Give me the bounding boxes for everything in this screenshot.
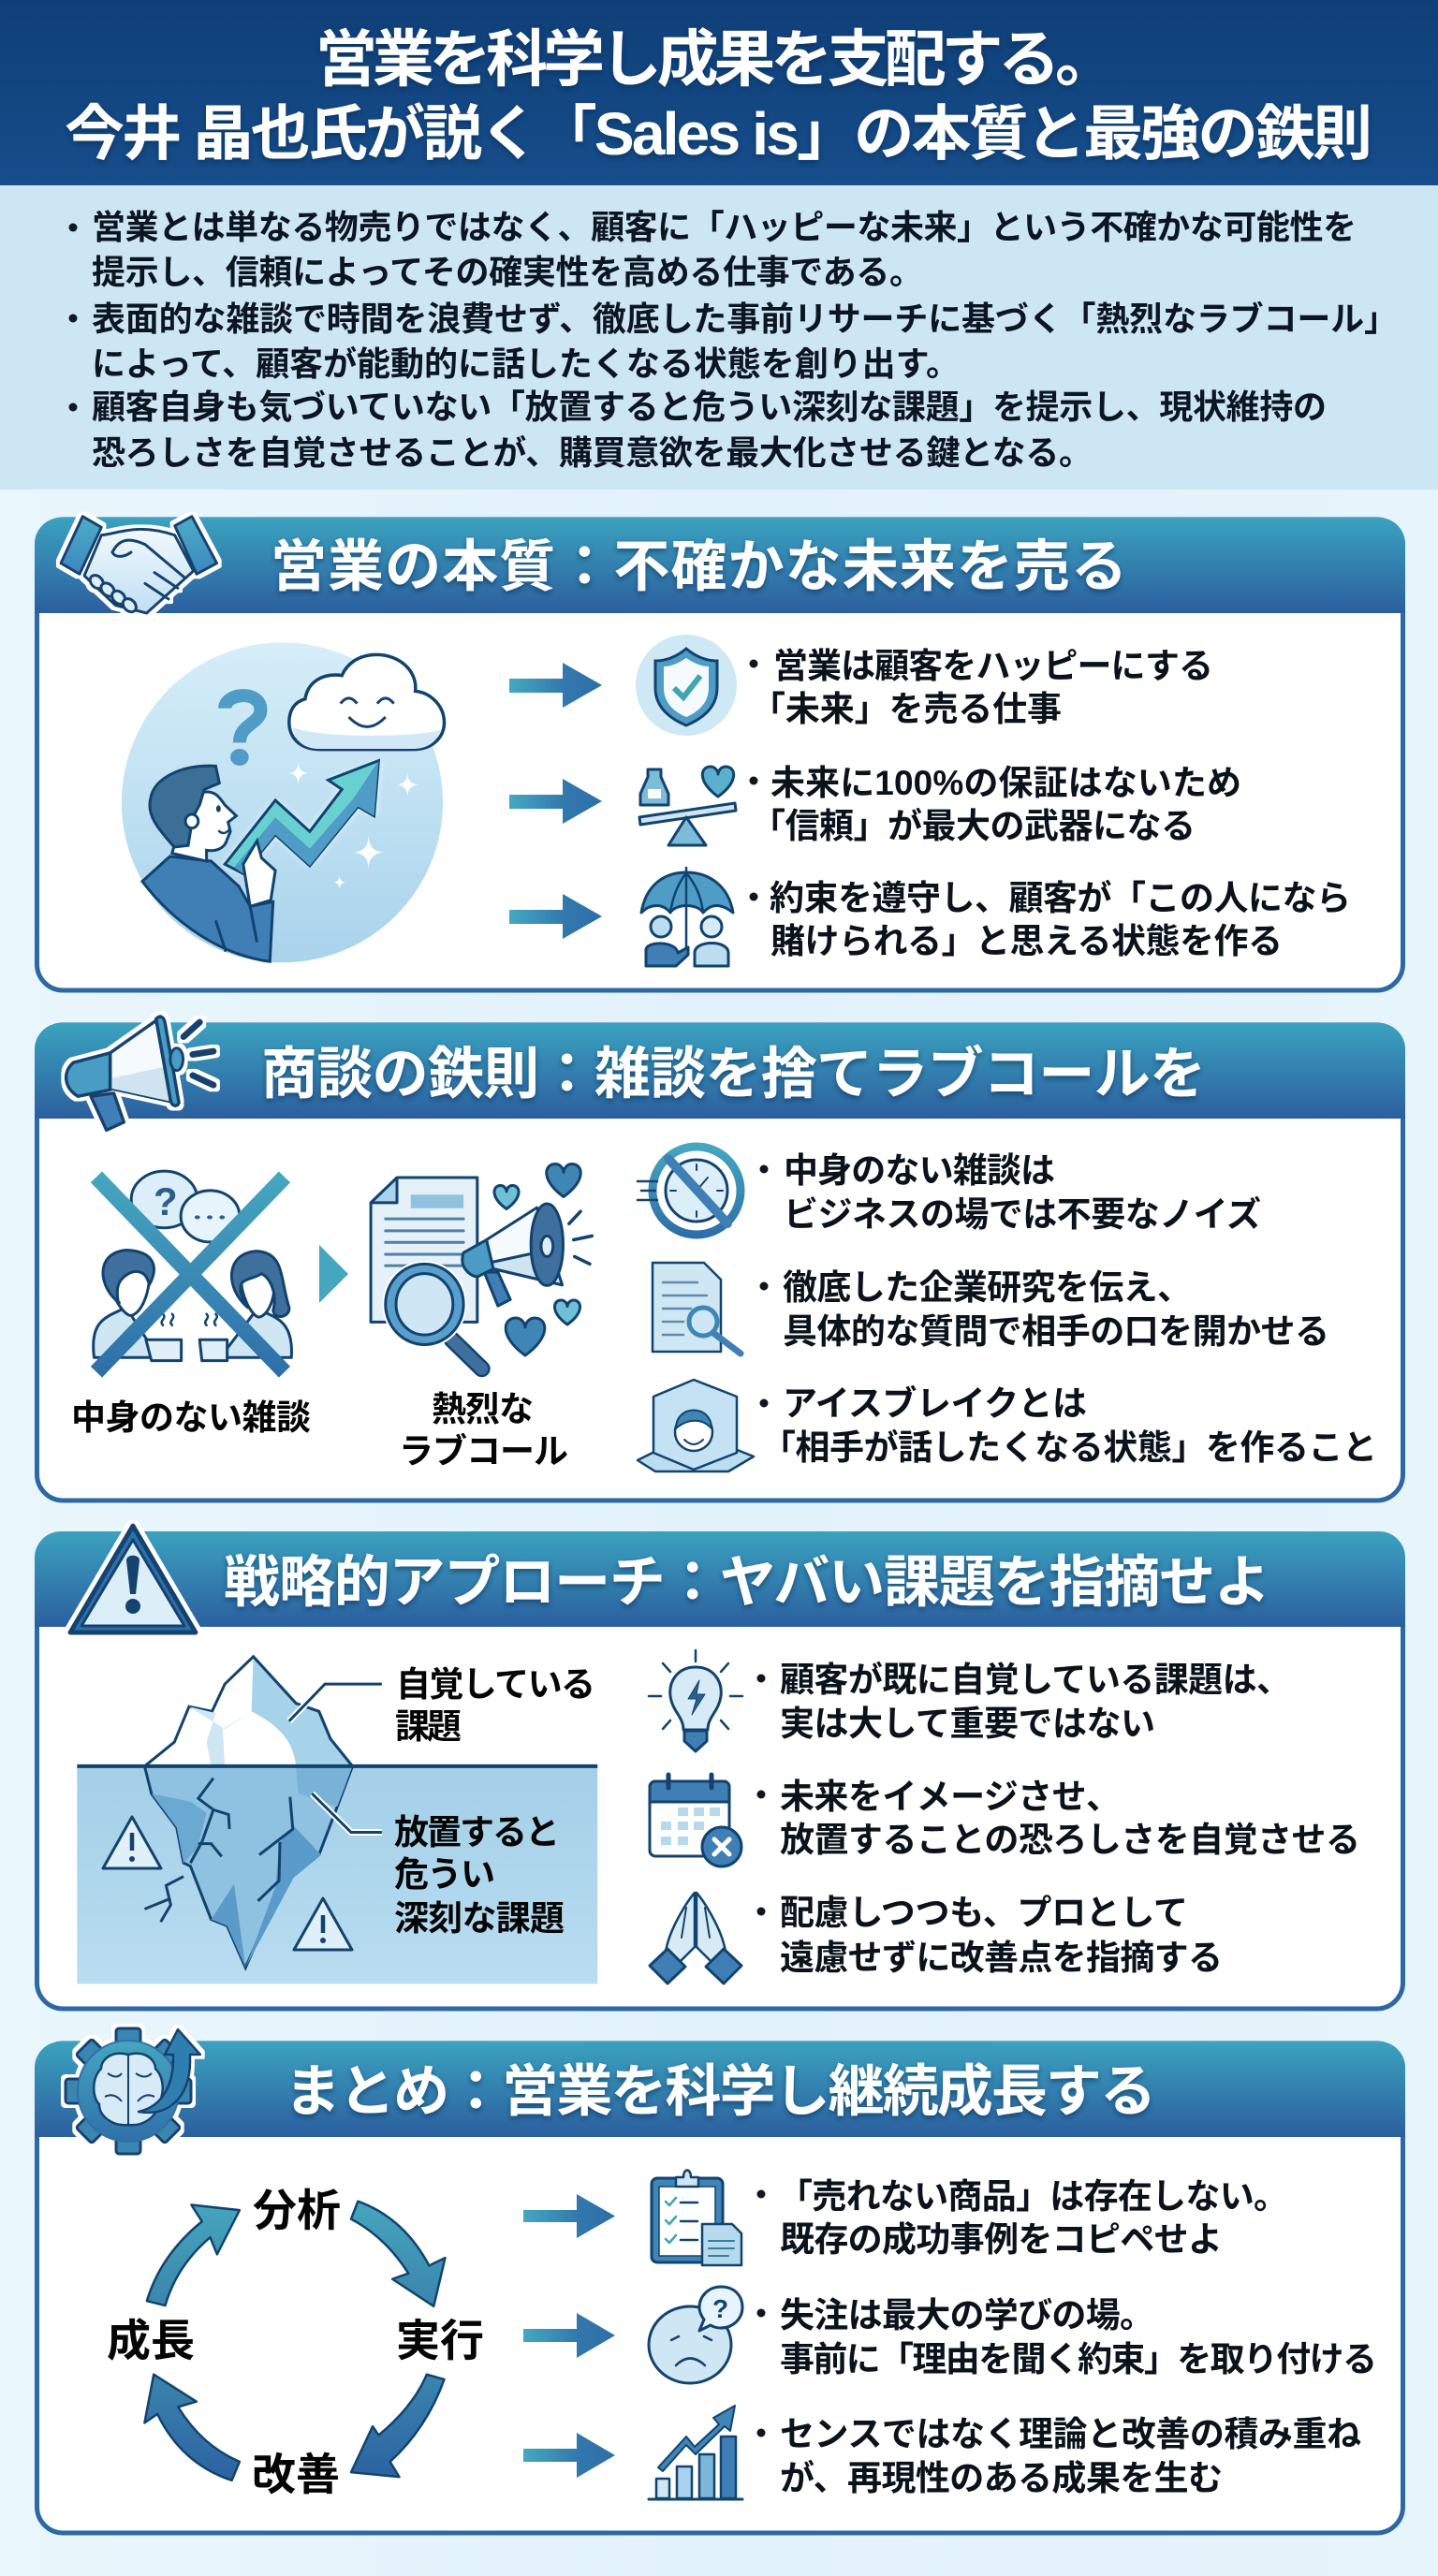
panel heading xyxy=(35,518,1405,613)
bullet text 3: 約束を遵守し、顧客が「この人になら xyxy=(770,879,1351,917)
icon: sad face with question xyxy=(649,2287,742,2383)
bullet text 5: 徹底した企業研究を伝え、 xyxy=(783,1268,1192,1307)
bullet text 12: が、再現性のある成果を生む xyxy=(780,2459,1223,2497)
icon: praying hands xyxy=(650,1893,741,1983)
bullet text 2 xyxy=(749,764,1241,845)
icon: light bulb xyxy=(649,1650,742,1751)
bullet text 12 xyxy=(756,2415,1361,2497)
bullet text 11: 失注は最大の学びの場。 xyxy=(780,2296,1154,2334)
arrow 2 xyxy=(509,779,602,824)
bullet text 9 xyxy=(756,1894,1223,1977)
question mark in bubble: ? xyxy=(154,1179,178,1223)
bullet text 6 xyxy=(760,1383,1377,1467)
bullet text 9: 遠慮せずに改善点を指摘する xyxy=(780,1939,1223,1977)
label: 熱烈なラブコール xyxy=(399,1390,568,1471)
label: 放置すると危うい深刻な課題: 放置すると xyxy=(394,1813,560,1852)
panel card xyxy=(37,1025,1402,1500)
arrow triangle xyxy=(319,1245,348,1303)
summary block xyxy=(0,185,1438,490)
title banner: 今井 晶也氏が説く「Sales is」の本質と最強の鉄則 xyxy=(65,100,1372,168)
summary block: 表面的な雑談で時間を浪費せず、徹底した事前リサーチに基づく「熱烈なラブコール」 xyxy=(92,300,1398,338)
arrow 4 xyxy=(523,2194,615,2238)
label: 分析: 分析 xyxy=(253,2186,341,2235)
bullet text 2: 未来に100%の保証はないため xyxy=(770,764,1241,802)
label: 放置すると危うい深刻な課題: 深刻な課題 xyxy=(394,1899,565,1938)
panel card xyxy=(37,1534,1402,2009)
bullet text 10 xyxy=(756,2177,1288,2259)
bullet text 7: 顧客が既に自覚している課題は、 xyxy=(780,1661,1291,1699)
small warning right xyxy=(294,1898,352,1950)
icon: balance xyxy=(639,767,736,845)
bullet text 1: 「未来」を売る仕事 xyxy=(751,690,1062,728)
bullet text 8 xyxy=(756,1778,1360,1859)
panel heading: 戦略的アプローチ：ヤバい課題を指摘せよ xyxy=(224,1551,1270,1614)
bullet text 10: 「売れない商品」は存在しない。 xyxy=(778,2177,1288,2216)
illustration: iceberg xyxy=(77,1657,597,1983)
question mark in bubble: ? xyxy=(712,2294,728,2323)
bullet text 5 xyxy=(760,1268,1329,1351)
panel card xyxy=(37,2043,1402,2533)
bullet text 12: センスではなく理論と改善の積み重ね xyxy=(780,2415,1361,2453)
bullet text 6: アイスブレイクとは xyxy=(783,1383,1087,1423)
label: 放置すると危うい深刻な課題 xyxy=(394,1813,565,1938)
bullet text 3 xyxy=(749,879,1351,960)
icon: ice cube with face xyxy=(638,1380,754,1471)
icon: warning triangle xyxy=(70,1526,196,1632)
bullet text 4: 中身のない雑談は xyxy=(784,1151,1055,1190)
panel: 商談の鉄則 xyxy=(35,1017,1405,1500)
icon: handshake xyxy=(61,517,217,615)
icon: shield xyxy=(636,635,737,736)
arrow 5 xyxy=(523,2313,615,2358)
panel: 営業の本質 xyxy=(35,517,1405,990)
arrow 1 xyxy=(509,663,602,708)
bullet text 5: 具体的な質問で相手の口を開かせる xyxy=(783,1312,1329,1351)
illustration: man and future xyxy=(122,642,445,962)
bullet text 10: 既存の成功事例をコピペせよ xyxy=(780,2220,1223,2259)
summary block: 提示し、信頼によってその確実性を高める仕事である。 xyxy=(92,253,923,291)
arrow 3 xyxy=(509,894,602,939)
icon: gear with brain xyxy=(66,2028,200,2154)
panel: まとめ xyxy=(35,2028,1405,2533)
arrow 6 xyxy=(523,2433,615,2478)
small warning left xyxy=(103,1817,161,1868)
bullet text 4: ビジネスの場では不要なノイズ xyxy=(784,1195,1261,1234)
bullet text 7 xyxy=(756,1661,1291,1743)
icon: clipboard xyxy=(652,2170,741,2265)
title banner: 営業を科学し成果を支配する。 xyxy=(315,24,1117,94)
icon: umbrella with people xyxy=(641,868,733,966)
panel heading: 営業の本質：不確かな未来を売る xyxy=(271,535,1127,598)
label: 熱烈なラブコール: ラブコール xyxy=(399,1431,568,1471)
icon: growth chart xyxy=(649,2406,742,2499)
hearts xyxy=(494,1164,580,1355)
bullet text 7: 実は大して重要ではない xyxy=(780,1705,1155,1743)
summary block: によって、顧客が能動的に話したくなる状態を創り出す。 xyxy=(92,344,960,383)
label: 実行: 実行 xyxy=(396,2316,484,2365)
panel heading: まとめ：営業を科学し継続成長する xyxy=(285,2060,1156,2123)
label: 中身のない雑談: 中身のない雑談 xyxy=(71,1398,311,1437)
panel: 戦略的アプローチ xyxy=(35,1526,1405,2009)
title banner xyxy=(0,0,1438,185)
bullet text 6: 「相手が話したくなる状態」を作ること xyxy=(761,1428,1377,1467)
panel heading: 商談の鉄則：雑談を捨てラブコールを xyxy=(261,1043,1206,1105)
label: 熱烈なラブコール: 熱烈な xyxy=(432,1390,534,1428)
label: 放置すると危うい深刻な課題: 危うい xyxy=(394,1855,495,1894)
illustration: love call xyxy=(371,1178,592,1368)
summary block: 顧客自身も気づいていない「放置すると危うい深刻な課題」を提示し、現状維持の xyxy=(92,388,1327,426)
bullet text 11 xyxy=(756,2296,1377,2378)
bullet text 9: 配慮しつつも、プロとして xyxy=(780,1894,1188,1932)
bullet text 1: 営業は顧客をハッピーにする xyxy=(773,647,1213,685)
bullet text 8: 未来をイメージさせ、 xyxy=(780,1778,1121,1816)
icon: research document xyxy=(653,1263,741,1354)
bullet text 1 xyxy=(749,647,1213,728)
cycle diagram arrows xyxy=(144,2202,445,2481)
bullet text 11: 事前に「理由を聞く約束」を取り付ける xyxy=(780,2340,1377,2378)
bullet text 2: 「信頼」が最大の武器になる xyxy=(751,807,1196,845)
panel heading xyxy=(35,1531,1405,1627)
bullet text 4 xyxy=(760,1151,1261,1234)
label: 自覚している課題 xyxy=(395,1665,595,1746)
panel heading xyxy=(35,1023,1405,1119)
illustration: empty small talk crossed out xyxy=(94,1171,291,1372)
bullet text 8: 放置することの恐ろしさを自覚させる xyxy=(780,1821,1360,1859)
icon: no clock xyxy=(638,1147,741,1235)
icon: megaphone xyxy=(66,1017,213,1130)
icon: calendar xyxy=(650,1775,741,1866)
label: 自覚している課題: 自覚している xyxy=(396,1665,595,1704)
bullet text 3: 賭けられる」と思える状態を作る xyxy=(770,922,1283,960)
label: 改善: 改善 xyxy=(252,2450,340,2499)
label: 成長: 成長 xyxy=(107,2316,195,2365)
panel heading xyxy=(35,2042,1405,2137)
label: 自覚している課題: 課題 xyxy=(395,1707,462,1746)
summary block: 営業とは単なる物売りではなく、顧客に「ハッピーな未来」という不確かな可能性を xyxy=(92,208,1357,246)
panel card xyxy=(37,520,1402,990)
summary block: 恐ろしさを自覚させることが、購買意欲を最大化させる鍵となる。 xyxy=(92,433,1093,472)
